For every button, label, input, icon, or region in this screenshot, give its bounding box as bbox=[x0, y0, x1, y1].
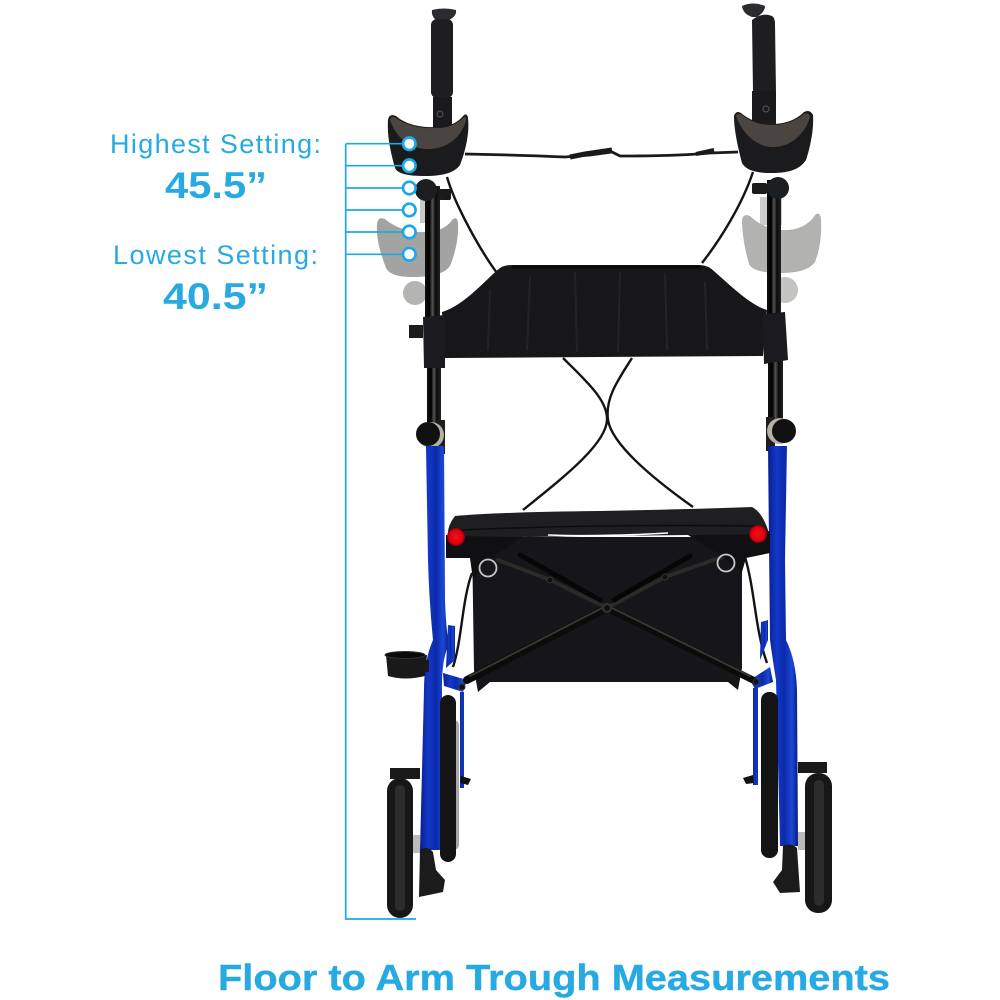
left hand grip bbox=[431, 8, 456, 129]
chest strap with buckle bbox=[465, 150, 738, 157]
lowest setting value: 40.5” bbox=[163, 276, 268, 317]
right arm trough bbox=[734, 111, 813, 173]
right hand grip bbox=[742, 4, 776, 124]
arm trough knobs bbox=[415, 177, 789, 201]
title: Floor to Arm Trough Measurements bbox=[218, 957, 890, 998]
upright posts bbox=[425, 180, 783, 428]
storage basket bbox=[472, 537, 742, 692]
left arm trough bbox=[388, 114, 468, 176]
ghost lowest arm trough left bbox=[377, 195, 458, 305]
blue frame bbox=[420, 446, 798, 850]
seat bbox=[446, 507, 770, 580]
height adjustment knobs bbox=[416, 417, 796, 454]
lowest setting label: Lowest Setting: bbox=[113, 240, 318, 270]
highest setting label: Highest Setting: bbox=[110, 129, 321, 159]
measurement scale lines bbox=[346, 144, 416, 919]
seat back sling bbox=[409, 265, 788, 368]
hanger rings bbox=[480, 554, 734, 576]
folding x-brace bbox=[459, 555, 759, 690]
measurement setting markers bbox=[403, 137, 416, 261]
red reflectors bbox=[447, 525, 767, 546]
brake feet bbox=[419, 844, 800, 897]
rear wheels bbox=[440, 692, 778, 862]
highest setting value: 45.5” bbox=[165, 165, 267, 206]
front wheels bbox=[387, 762, 832, 918]
cup holder bbox=[385, 652, 429, 678]
support wires bbox=[447, 172, 767, 667]
ghost lowest arm trough right bbox=[742, 197, 821, 303]
rollator photo illustration bbox=[377, 4, 832, 918]
